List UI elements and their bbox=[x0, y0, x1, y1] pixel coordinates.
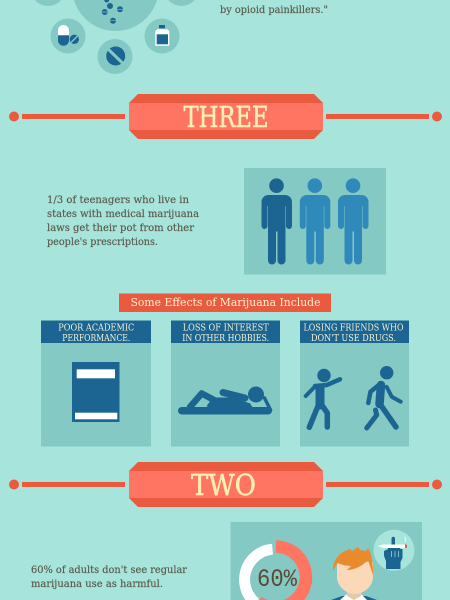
icon: tablet bbox=[98, 39, 132, 74]
text block: teenagers statistic: states with medical marijuana bbox=[47, 208, 199, 220]
icon: person blue bbox=[300, 178, 330, 264]
icon: book bbox=[72, 362, 120, 422]
panel: losing friends: DON'T USE DRUGS. bbox=[311, 333, 396, 344]
panel: losing friends bbox=[300, 320, 409, 446]
text block: adults statistic bbox=[31, 564, 188, 590]
heading: some effects: Some Effects of Marijuana Include bbox=[130, 295, 321, 309]
panel: losing friends: LOSING FRIENDS WHO bbox=[304, 322, 404, 333]
text block: teenagers statistic: laws get their pot from other bbox=[47, 222, 195, 234]
panel: three people bbox=[244, 168, 386, 274]
icon: person dark bbox=[262, 178, 292, 264]
icon: person lying down bbox=[178, 386, 272, 414]
icon: scattered pills bbox=[102, 0, 123, 24]
panel: poor academic performance bbox=[41, 320, 151, 446]
icon: person walking away bbox=[367, 366, 401, 428]
text block: adults statistic: marijuana use as harmful. bbox=[31, 578, 163, 590]
section banner: three: THREE bbox=[184, 100, 268, 134]
panel: loss of interest: IN OTHER HOBBIES. bbox=[182, 333, 269, 344]
icon: person waving bbox=[306, 369, 340, 427]
donut chart: 60% bbox=[245, 546, 306, 600]
icon: person blue bbox=[338, 178, 368, 264]
section banner: three bbox=[9, 94, 442, 139]
panel: poor academic performance: PERFORMANCE. bbox=[62, 333, 130, 344]
text block: teenagers statistic: people's prescriptions. bbox=[47, 236, 158, 248]
panel: sixty percent bbox=[230, 522, 422, 600]
panel: loss of interest bbox=[171, 320, 280, 446]
icon: person with orange hair bbox=[331, 547, 377, 600]
text block: teenagers statistic bbox=[47, 194, 199, 248]
icon: pill bottle bbox=[144, 18, 180, 54]
section banner: two bbox=[9, 462, 442, 507]
pill icon cluster bbox=[30, 0, 199, 74]
donut chart: 60%: 60% bbox=[257, 565, 298, 594]
panel: loss of interest: LOSS OF INTEREST bbox=[183, 322, 269, 333]
section banner: two: TWO bbox=[191, 468, 256, 502]
icon: capsule and tablet bbox=[50, 18, 86, 54]
icon: hand with cigarette bbox=[374, 530, 414, 571]
text block: adults statistic: 60% of adults don't see regular bbox=[31, 564, 188, 576]
panel: poor academic performance: POOR ACADEMIC bbox=[58, 322, 134, 333]
quote text: by opioid painkillers." bbox=[220, 4, 328, 16]
text block: teenagers statistic: 1/3 of teenagers who live in bbox=[47, 194, 189, 206]
